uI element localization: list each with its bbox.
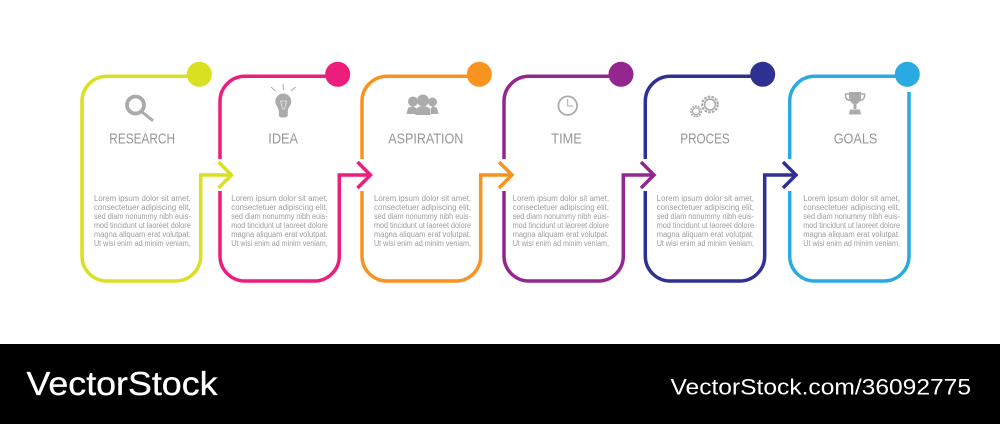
icon: gears <box>691 97 718 117</box>
text block: research: Ut wisi enim ad minim veniam, <box>94 239 191 248</box>
text block: research: magna aliquam erat volutpat. <box>94 230 191 239</box>
text block: research: sed diam nonummy nibh euis- <box>94 212 191 221</box>
outline and arrow: aspiration <box>362 76 512 281</box>
marker dot: time <box>608 62 634 87</box>
outline: goals <box>790 76 909 281</box>
footer url text: VectorStock.com/36092775 <box>670 374 971 400</box>
text block: goals: Lorem ipsum dolor sit amet, <box>803 194 900 203</box>
heading: aspiration: ASPIRATION <box>388 130 463 147</box>
text block: research: consectetuer adipiscing elit, <box>94 203 191 212</box>
text block: proces: Ut wisi enim ad minim veniam, <box>657 239 754 248</box>
outline and arrow: research <box>82 76 232 281</box>
text block: aspiration: consectetuer adipiscing elit, <box>374 203 471 212</box>
text block: research <box>94 194 191 248</box>
panel: proces <box>645 62 796 281</box>
text block: goals: sed diam nonummy nibh euis- <box>803 212 900 221</box>
text block: research: Lorem ipsum dolor sit amet, <box>94 194 191 203</box>
text block: aspiration: Lorem ipsum dolor sit amet, <box>374 194 471 203</box>
outline and arrow: idea <box>220 76 370 281</box>
icon: trophy <box>845 92 865 114</box>
text block: goals: consectetuer adipiscing elit, <box>803 203 900 212</box>
text block: time: Ut wisi enim ad minim veniam, <box>513 239 609 248</box>
text block: time: Lorem ipsum dolor sit amet, <box>513 194 609 203</box>
text block: goals: Ut wisi enim ad minim veniam, <box>803 239 900 248</box>
heading: time: TIME <box>551 130 582 147</box>
text block: idea: consectetuer adipiscing elit, <box>231 203 328 212</box>
text block: time: mod tincidunt ut laoreet dolore <box>513 221 609 230</box>
marker dot: idea <box>325 62 350 87</box>
text block: aspiration <box>374 194 471 248</box>
footer logo text: VectorStock <box>26 366 218 403</box>
icon: light bulb <box>271 84 296 118</box>
text block: proces: mod tincidunt ut laoreet dolore <box>657 221 754 230</box>
heading: goals: GOALS <box>834 130 877 147</box>
marker dot: aspiration <box>467 62 492 87</box>
marker dot: research <box>187 62 212 87</box>
marker dot: goals <box>895 62 920 87</box>
text block: idea: magna aliquam erat volutpat. <box>231 230 328 239</box>
text block: research: mod tincidunt ut laoreet dolore <box>94 221 191 230</box>
icon: magnifier <box>127 96 153 121</box>
text block: time <box>513 194 609 248</box>
icon: people <box>406 94 438 115</box>
icon: clock <box>558 96 577 115</box>
text block: goals <box>803 194 900 248</box>
text block: aspiration: sed diam nonummy nibh euis- <box>374 212 471 221</box>
text block: proces: Lorem ipsum dolor sit amet, <box>657 194 754 203</box>
heading: idea: IDEA <box>268 130 298 147</box>
text block: time: sed diam nonummy nibh euis- <box>513 212 609 221</box>
marker dot: proces <box>750 62 775 87</box>
text block: time: consectetuer adipiscing elit, <box>513 203 609 212</box>
footer bar <box>0 344 1000 424</box>
text block: goals: mod tincidunt ut laoreet dolore <box>803 221 900 230</box>
outline and arrow: proces <box>645 76 796 281</box>
panel: idea <box>220 62 370 281</box>
text block: aspiration: magna aliquam erat volutpat. <box>374 230 471 239</box>
panel: time <box>504 62 654 281</box>
text block: idea: Lorem ipsum dolor sit amet, <box>231 194 328 203</box>
heading: proces: PROCES <box>680 130 730 147</box>
panel: aspiration <box>362 62 512 281</box>
panel: goals <box>790 62 920 281</box>
text block: time: magna aliquam erat volutpat. <box>513 230 609 239</box>
text block: proces: sed diam nonummy nibh euis- <box>657 212 754 221</box>
outline and arrow: time <box>504 76 654 281</box>
text block: aspiration: Ut wisi enim ad minim veniam, <box>374 239 471 248</box>
text block: idea: sed diam nonummy nibh euis- <box>231 212 328 221</box>
text block: proces: consectetuer adipiscing elit, <box>657 203 754 212</box>
text block: aspiration: mod tincidunt ut laoreet dolore <box>374 221 471 230</box>
panel: research <box>82 62 232 281</box>
heading: research: RESEARCH <box>109 130 175 147</box>
text block: proces: magna aliquam erat volutpat. <box>657 230 754 239</box>
text block: goals: magna aliquam erat volutpat. <box>803 230 900 239</box>
text block: proces <box>657 194 754 248</box>
text block: idea: mod tincidunt ut laoreet dolore <box>231 221 328 230</box>
text block: idea: Ut wisi enim ad minim veniam, <box>231 239 328 248</box>
text block: idea <box>231 194 328 248</box>
